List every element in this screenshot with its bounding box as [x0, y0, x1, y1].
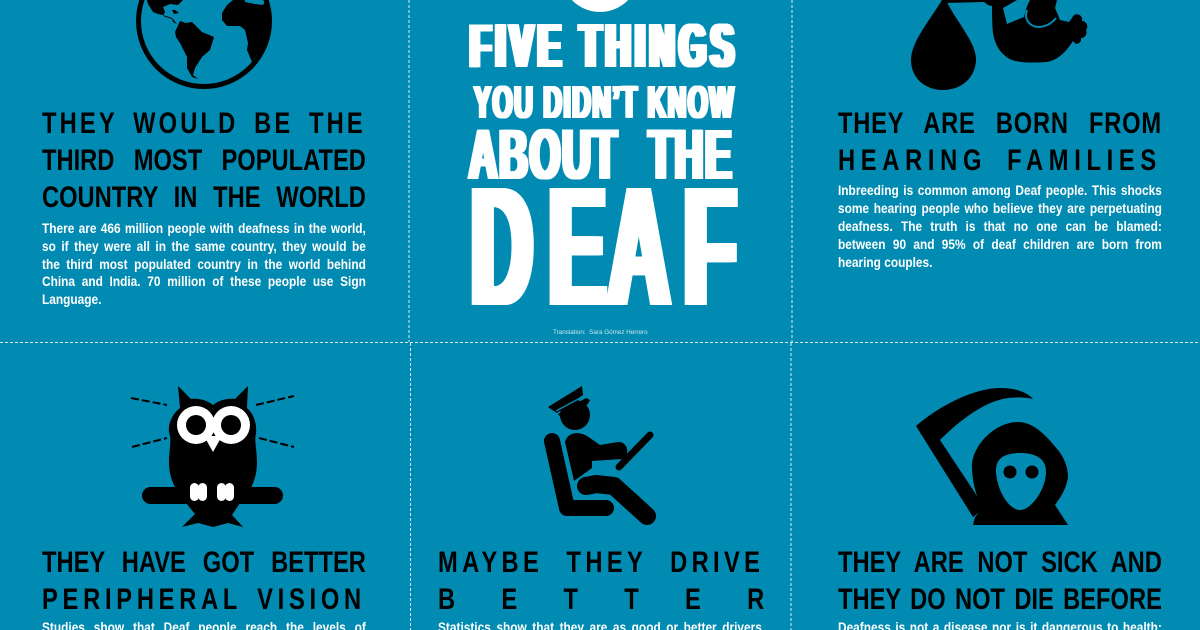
text: third most populated [42, 221, 366, 307]
panel: title [467, 0, 739, 342]
text: third most populated: so if they were all in the same country, they would be [42, 239, 366, 254]
text: hearing families [838, 183, 1162, 270]
heading: third most populated: COUNTRY IN THE WORLD [42, 181, 366, 214]
heading: drive better: MAYBE THEY DRIVE [438, 546, 764, 579]
heading: hearing families: THEY ARE BORN FROM [838, 107, 1162, 140]
panel: drive better [438, 386, 764, 630]
text: hearing families: some hearing people who believe they are perpetuating [838, 201, 1162, 216]
title: FIVE THINGS [470, 12, 739, 80]
panel: peripheral vision [42, 386, 366, 630]
heading: third most populated [42, 107, 366, 214]
icon: reaper [916, 388, 1068, 525]
heading: not sick: THEY DO NOT DIE BEFORE [838, 583, 1162, 616]
heading: drive better [438, 546, 764, 616]
title: ABOUT THE [469, 116, 734, 195]
text: third most populated: the third most populated country in the world behind [42, 257, 366, 272]
icon: owl [130, 386, 294, 527]
heading: not sick [838, 546, 1162, 616]
heading: third most populated: THEY WOULD BE THE [42, 107, 366, 140]
heading: not sick: THEY ARE NOT SICK AND [838, 546, 1162, 579]
text: hearing families: between 90 and 95% of deaf children are born from [838, 237, 1162, 252]
heading: drive better: B E T T E R [438, 583, 764, 616]
text: hearing families: hearing couples. [838, 255, 932, 270]
text: third most populated: Language. [42, 292, 101, 307]
heading: peripheral vision [42, 546, 366, 616]
icon: stork bundle [911, 0, 1088, 90]
panel: not sick [838, 388, 1162, 630]
text: third most populated: China and India. 70 million of these people use Sign [42, 274, 366, 289]
icon: globe [136, 0, 272, 89]
panel: hearing families [838, 0, 1162, 270]
text: hearing families: deafness. The truth is that no one can be blamed: [838, 219, 1162, 234]
heading: hearing families [838, 107, 1162, 177]
panel: third most populated country [42, 0, 366, 307]
heading: third most populated: THIRD MOST POPULATED [42, 144, 366, 177]
heading: peripheral vision: THEY HAVE GOT BETTER [42, 546, 366, 579]
heading: peripheral vision: PERIPHERAL VISION [42, 583, 366, 616]
heading: hearing families: HEARING FAMILIES [838, 144, 1162, 177]
text: third most populated: There are 466 million people with deafness in the world, [42, 221, 366, 236]
icon: driver [544, 386, 656, 525]
title [467, 12, 739, 342]
text: hearing families: Inbreeding is common among Deaf people. This shocks [838, 183, 1162, 198]
title: DEAF [471, 152, 736, 342]
icon: white circle [572, 0, 628, 12]
credit: translation: Translation: Sara Gómez Herrero [553, 329, 648, 336]
title: YOU DIDN’T KNOW [474, 76, 735, 128]
